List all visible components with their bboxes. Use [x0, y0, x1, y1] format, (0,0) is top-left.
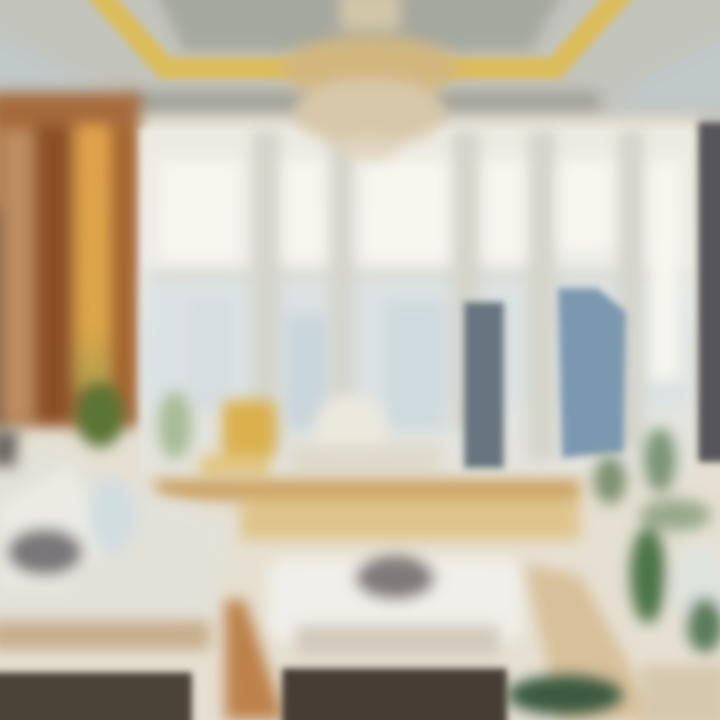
right dark column [698, 122, 720, 462]
wooden table [155, 480, 580, 540]
ceiling gold frame [95, 0, 625, 68]
chandelier [282, 0, 458, 160]
ceiling [0, 0, 720, 132]
skyline towers [464, 288, 626, 468]
centre sofa [268, 556, 523, 655]
left sofa with cushions [0, 430, 230, 650]
right plant [507, 428, 720, 720]
left wood wall [0, 92, 140, 430]
dark sofa bases [0, 668, 507, 720]
window mullions [252, 130, 644, 460]
wood floor [225, 565, 660, 720]
lower room base [0, 545, 720, 670]
plants and vase on table [76, 383, 440, 477]
windows [140, 128, 695, 473]
